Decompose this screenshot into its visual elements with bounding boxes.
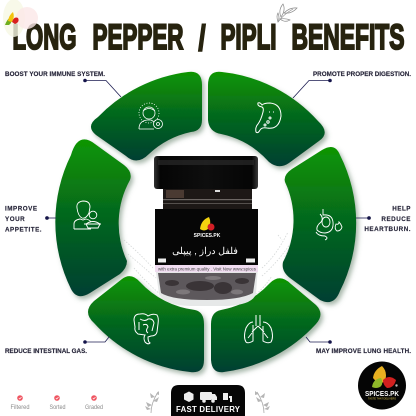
callout: heartburn: [356, 206, 411, 233]
fast delivery badge: [171, 385, 245, 416]
callout: heartburn: HEARTBURN.: [364, 226, 411, 233]
title: PEPPER: [92, 17, 184, 57]
callout: appetite: APPETITE.: [5, 226, 42, 234]
benefit ring: [55, 72, 356, 372]
quality badge: sorted: [50, 395, 66, 411]
quality badge: filtered: [10, 395, 30, 411]
callout: appetite: IMPROVE: [5, 206, 38, 212]
segment: lung health: [211, 278, 320, 372]
callout: heartburn: REDUCE: [381, 216, 411, 223]
callout: heartburn: HELP: [392, 206, 411, 212]
segment: immune system: [91, 72, 202, 161]
splash: [124, 232, 290, 296]
icon: person with appetite bowl: [74, 201, 101, 229]
label strip: with extra premium quality . Visit Now www.spices: [158, 266, 256, 272]
icon: intestines: [134, 314, 158, 344]
callout: intestinal gas: REDUCE INTESTINAL GAS.: [5, 348, 87, 355]
weight tags: [158, 258, 255, 262]
lid gloss: [158, 160, 254, 165]
lid: [154, 156, 258, 189]
quality badge: graded: Graded: [85, 404, 103, 411]
callout: intestinal gas: [5, 337, 109, 355]
quality badge: graded: [85, 395, 103, 411]
icon: phone order: [223, 393, 232, 402]
callout: digestion: [293, 71, 411, 98]
callout: lung health: [306, 337, 411, 355]
icon: leaf sprig at top: [277, 4, 297, 22]
brand logo badge: [358, 362, 406, 410]
segment: appetite: [55, 139, 131, 296]
icon: right sprig: [255, 391, 270, 413]
callout: digestion: PROMOTE PROPER DIGESTION.: [313, 71, 411, 78]
icon: pepper leaf logo mark at top left: [3, 0, 38, 37]
jar glass and peppers: [155, 266, 258, 306]
title: LONG: [12, 17, 76, 57]
icon: immune person with gear: [139, 103, 162, 129]
icon: truck: [200, 392, 217, 403]
icon: parcel: [184, 392, 194, 402]
icon: label logo: [200, 217, 214, 230]
icon: left sprig: [145, 391, 159, 413]
urdu product name: فلفل دراز , پیپلی: [172, 246, 238, 257]
label: [155, 209, 258, 266]
segment: heartburn: [283, 147, 356, 302]
title: [12, 17, 404, 58]
callout: immune: [5, 71, 121, 97]
brand logo badge: TASTE THAT DELIVERS: [368, 398, 396, 400]
callout: appetite: YOUR: [5, 216, 25, 223]
quality badge: sorted: Sorted: [50, 404, 66, 411]
brand logo badge: SPICES.PK: [365, 391, 399, 398]
quality badge: filtered: Filtered: [10, 404, 30, 411]
title: /: [198, 18, 206, 58]
neck: [163, 187, 252, 210]
icon: lungs: [244, 315, 272, 343]
segment: digestion: [208, 72, 325, 166]
title: PIPLI: [220, 17, 276, 57]
brand on label: SPICES.PK: [194, 233, 221, 239]
callout: lung health: MAY IMPROVE LUNG HEALTH.: [316, 348, 411, 355]
fast delivery badge: FAST DELIVERY: [176, 405, 241, 414]
callout: appetite: [5, 206, 56, 234]
label strip: [155, 265, 258, 272]
icon: heartburn stomach with flame: [316, 209, 342, 240]
icon: stomach: [256, 103, 281, 133]
product jar: [124, 156, 290, 306]
callout: immune: BOOST YOUR IMMUNE SYSTEM.: [5, 71, 105, 78]
segment: intestinal gas: [88, 276, 204, 372]
